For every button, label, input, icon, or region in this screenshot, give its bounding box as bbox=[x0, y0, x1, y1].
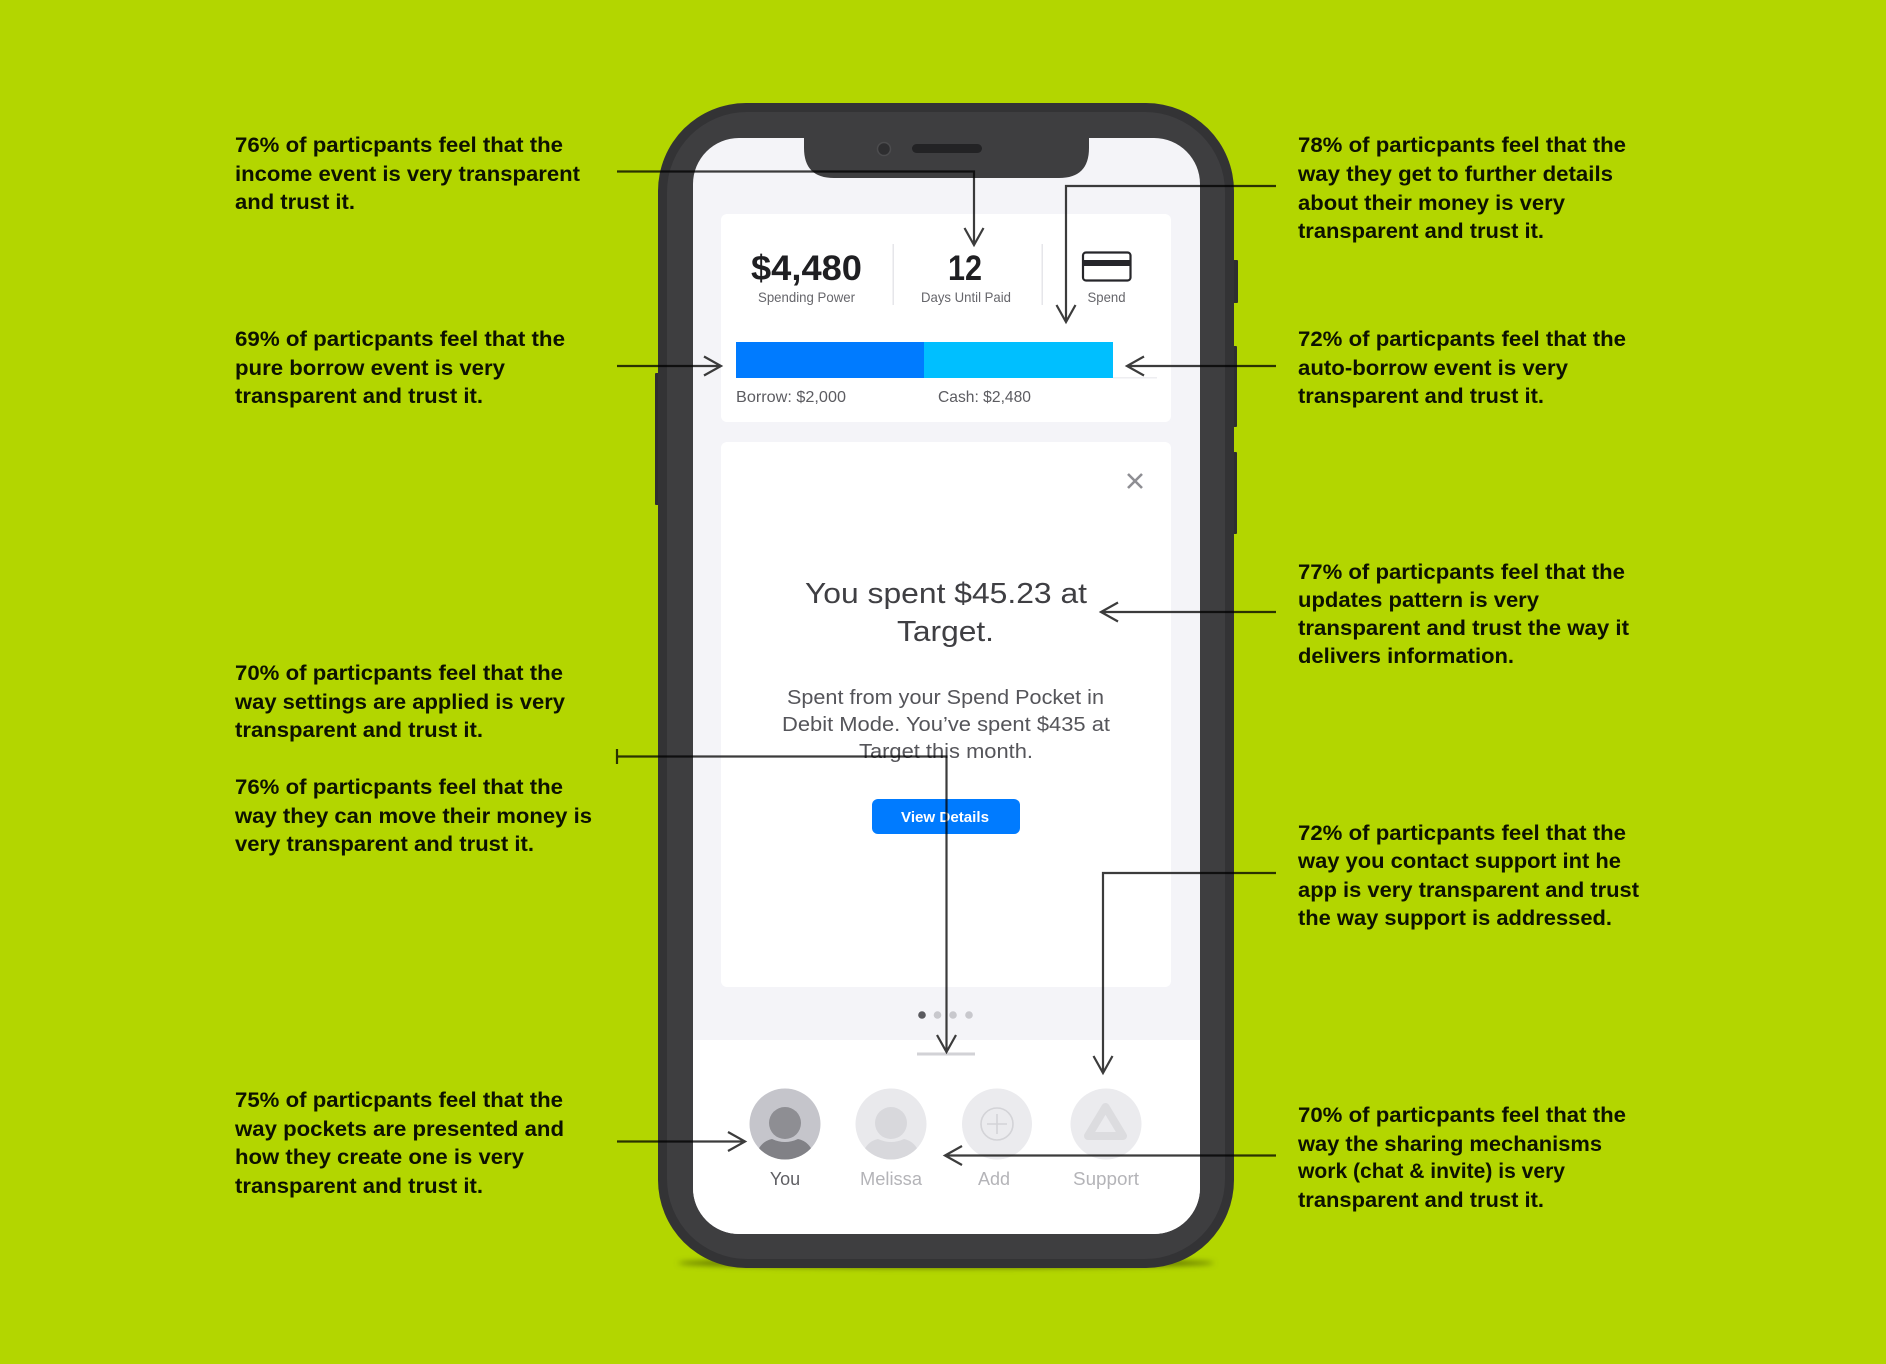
callout: further details: way they get to further details bbox=[1297, 163, 1613, 186]
callout: sharing mechanisms: transparent and trust it. bbox=[1298, 1189, 1544, 1212]
callout: contact support: way you contact support int he bbox=[1297, 850, 1621, 873]
callout: pockets: way pockets are presented and bbox=[234, 1118, 564, 1141]
bottom tray bbox=[693, 1040, 1200, 1234]
arrow: settings and move money to tray handle bbox=[617, 749, 956, 1052]
callout: settings: 70% of particpants feel that the bbox=[235, 662, 563, 685]
action: Support bbox=[1070, 1088, 1142, 1189]
stacked balance bar bbox=[736, 342, 1157, 378]
arrow: contact support to support icon bbox=[1094, 873, 1276, 1073]
callout: income event bbox=[235, 134, 580, 214]
callout: further details: about their money is very bbox=[1298, 192, 1565, 215]
phone body bbox=[658, 103, 1234, 1268]
avatar: You bbox=[750, 1088, 820, 1189]
callout: further details bbox=[1297, 134, 1626, 243]
callout: contact support: the way support is addressed. bbox=[1298, 907, 1612, 930]
arrow: income event to days until paid bbox=[617, 172, 984, 245]
avatar: Melissa: Melissa bbox=[860, 1169, 923, 1189]
avatar: You: You bbox=[770, 1169, 800, 1189]
card body text: Target this month. bbox=[859, 741, 1033, 763]
callout: pockets bbox=[234, 1089, 564, 1198]
pagination dots bbox=[918, 1011, 973, 1019]
icon: close bbox=[1128, 474, 1142, 488]
callout: income event: income event is very transparent bbox=[235, 163, 580, 186]
callout: updates pattern: 77% of particpants feel that the bbox=[1298, 561, 1625, 584]
callout: sharing mechanisms: way the sharing mechanisms bbox=[1297, 1133, 1602, 1156]
callout: move money: 76% of particpants feel that the bbox=[235, 776, 563, 799]
phone mockup bbox=[655, 103, 1238, 1268]
panel: balance summary bbox=[721, 214, 1171, 422]
avatar: Melissa bbox=[856, 1088, 926, 1189]
callout: updates pattern: delivers information. bbox=[1298, 645, 1514, 668]
card headline: Target. bbox=[897, 616, 994, 648]
arrow: pure borrow to bar bbox=[617, 356, 721, 376]
callout: contact support: 72% of particpants feel that the bbox=[1298, 822, 1626, 845]
callout: auto-borrow event: 72% of particpants feel that the bbox=[1298, 328, 1626, 351]
callout: updates pattern bbox=[1298, 561, 1629, 668]
panel: spending update card bbox=[721, 442, 1171, 987]
days until paid value: 12 bbox=[948, 249, 982, 288]
callout: settings bbox=[234, 662, 565, 742]
arrow: further details to bar bbox=[1056, 186, 1276, 322]
notch bbox=[804, 136, 1089, 178]
callout: pockets: 75% of particpants feel that the bbox=[235, 1089, 563, 1112]
icon: credit card bbox=[1083, 252, 1130, 280]
callout: sharing mechanisms bbox=[1297, 1104, 1626, 1212]
callout: income event: 76% of particpants feel that the bbox=[235, 134, 563, 157]
callout: settings: transparent and trust it. bbox=[235, 719, 483, 742]
card body text: Spent from your Spend Pocket in bbox=[787, 687, 1104, 709]
view details button: View Details bbox=[901, 809, 989, 826]
camera bbox=[878, 142, 890, 156]
callout: pure borrow event: transparent and trust it. bbox=[235, 385, 483, 408]
callout: auto-borrow event: transparent and trust it. bbox=[1298, 385, 1544, 408]
callout: sharing mechanisms: 70% of particpants feel that the bbox=[1298, 1104, 1626, 1127]
callout: contact support bbox=[1297, 822, 1639, 930]
callout: pure borrow event: pure borrow event is very bbox=[235, 357, 505, 380]
phone screen bbox=[693, 138, 1200, 1234]
card body text: Debit Mode. You’ve spent $435 at bbox=[782, 714, 1110, 736]
spending power label: Spending Power bbox=[758, 289, 855, 305]
action: Support: Support bbox=[1073, 1169, 1139, 1189]
callout: move money bbox=[234, 776, 592, 856]
callout: sharing mechanisms: work (chat & invite) is very bbox=[1297, 1160, 1565, 1183]
callout: income event: and trust it. bbox=[235, 191, 355, 214]
callout: further details: 78% of particpants feel that the bbox=[1298, 134, 1626, 157]
callout: pockets: transparent and trust it. bbox=[235, 1175, 483, 1198]
arrow: pockets to avatar bbox=[617, 1132, 745, 1151]
borrow label: Borrow: $2,000 bbox=[736, 389, 846, 406]
callout: updates pattern: updates pattern is very bbox=[1298, 589, 1539, 612]
tray handle bbox=[917, 1052, 975, 1056]
action: Add bbox=[962, 1088, 1032, 1189]
days until paid label: Days Until Paid bbox=[921, 289, 1011, 305]
view details button bbox=[872, 799, 1020, 834]
card headline: You spent $45.23 at bbox=[805, 578, 1087, 610]
callout: settings: way settings are applied is very bbox=[234, 691, 565, 714]
callout: move money: way they can move their money is bbox=[234, 805, 592, 828]
cash label: Cash: $2,480 bbox=[938, 389, 1031, 406]
phone shadow bbox=[678, 1258, 1214, 1268]
callout: updates pattern: transparent and trust the way it bbox=[1298, 617, 1629, 640]
callout: pure borrow event bbox=[235, 328, 565, 408]
callout: auto-borrow event bbox=[1298, 328, 1626, 408]
action: Add: Add bbox=[978, 1169, 1010, 1189]
callout: further details: transparent and trust it. bbox=[1298, 220, 1544, 243]
arrow: sharing to melissa bbox=[945, 1146, 1276, 1165]
callout: pockets: how they create one is very bbox=[235, 1146, 524, 1169]
callout: pure borrow event: 69% of particpants feel that the bbox=[235, 328, 565, 351]
callout: auto-borrow event: auto-borrow event is very bbox=[1298, 357, 1568, 380]
arrow: auto-borrow to bar bbox=[1127, 356, 1276, 376]
callout: move money: very transparent and trust it. bbox=[235, 833, 534, 856]
phone side buttons bbox=[655, 260, 1238, 534]
speaker bbox=[912, 144, 982, 153]
spend label: Spend bbox=[1088, 289, 1126, 305]
arrow: updates pattern to headline bbox=[1101, 602, 1276, 622]
callout: contact support: app is very transparent and trust bbox=[1298, 879, 1639, 902]
spending power value: $4,480 bbox=[751, 249, 862, 288]
